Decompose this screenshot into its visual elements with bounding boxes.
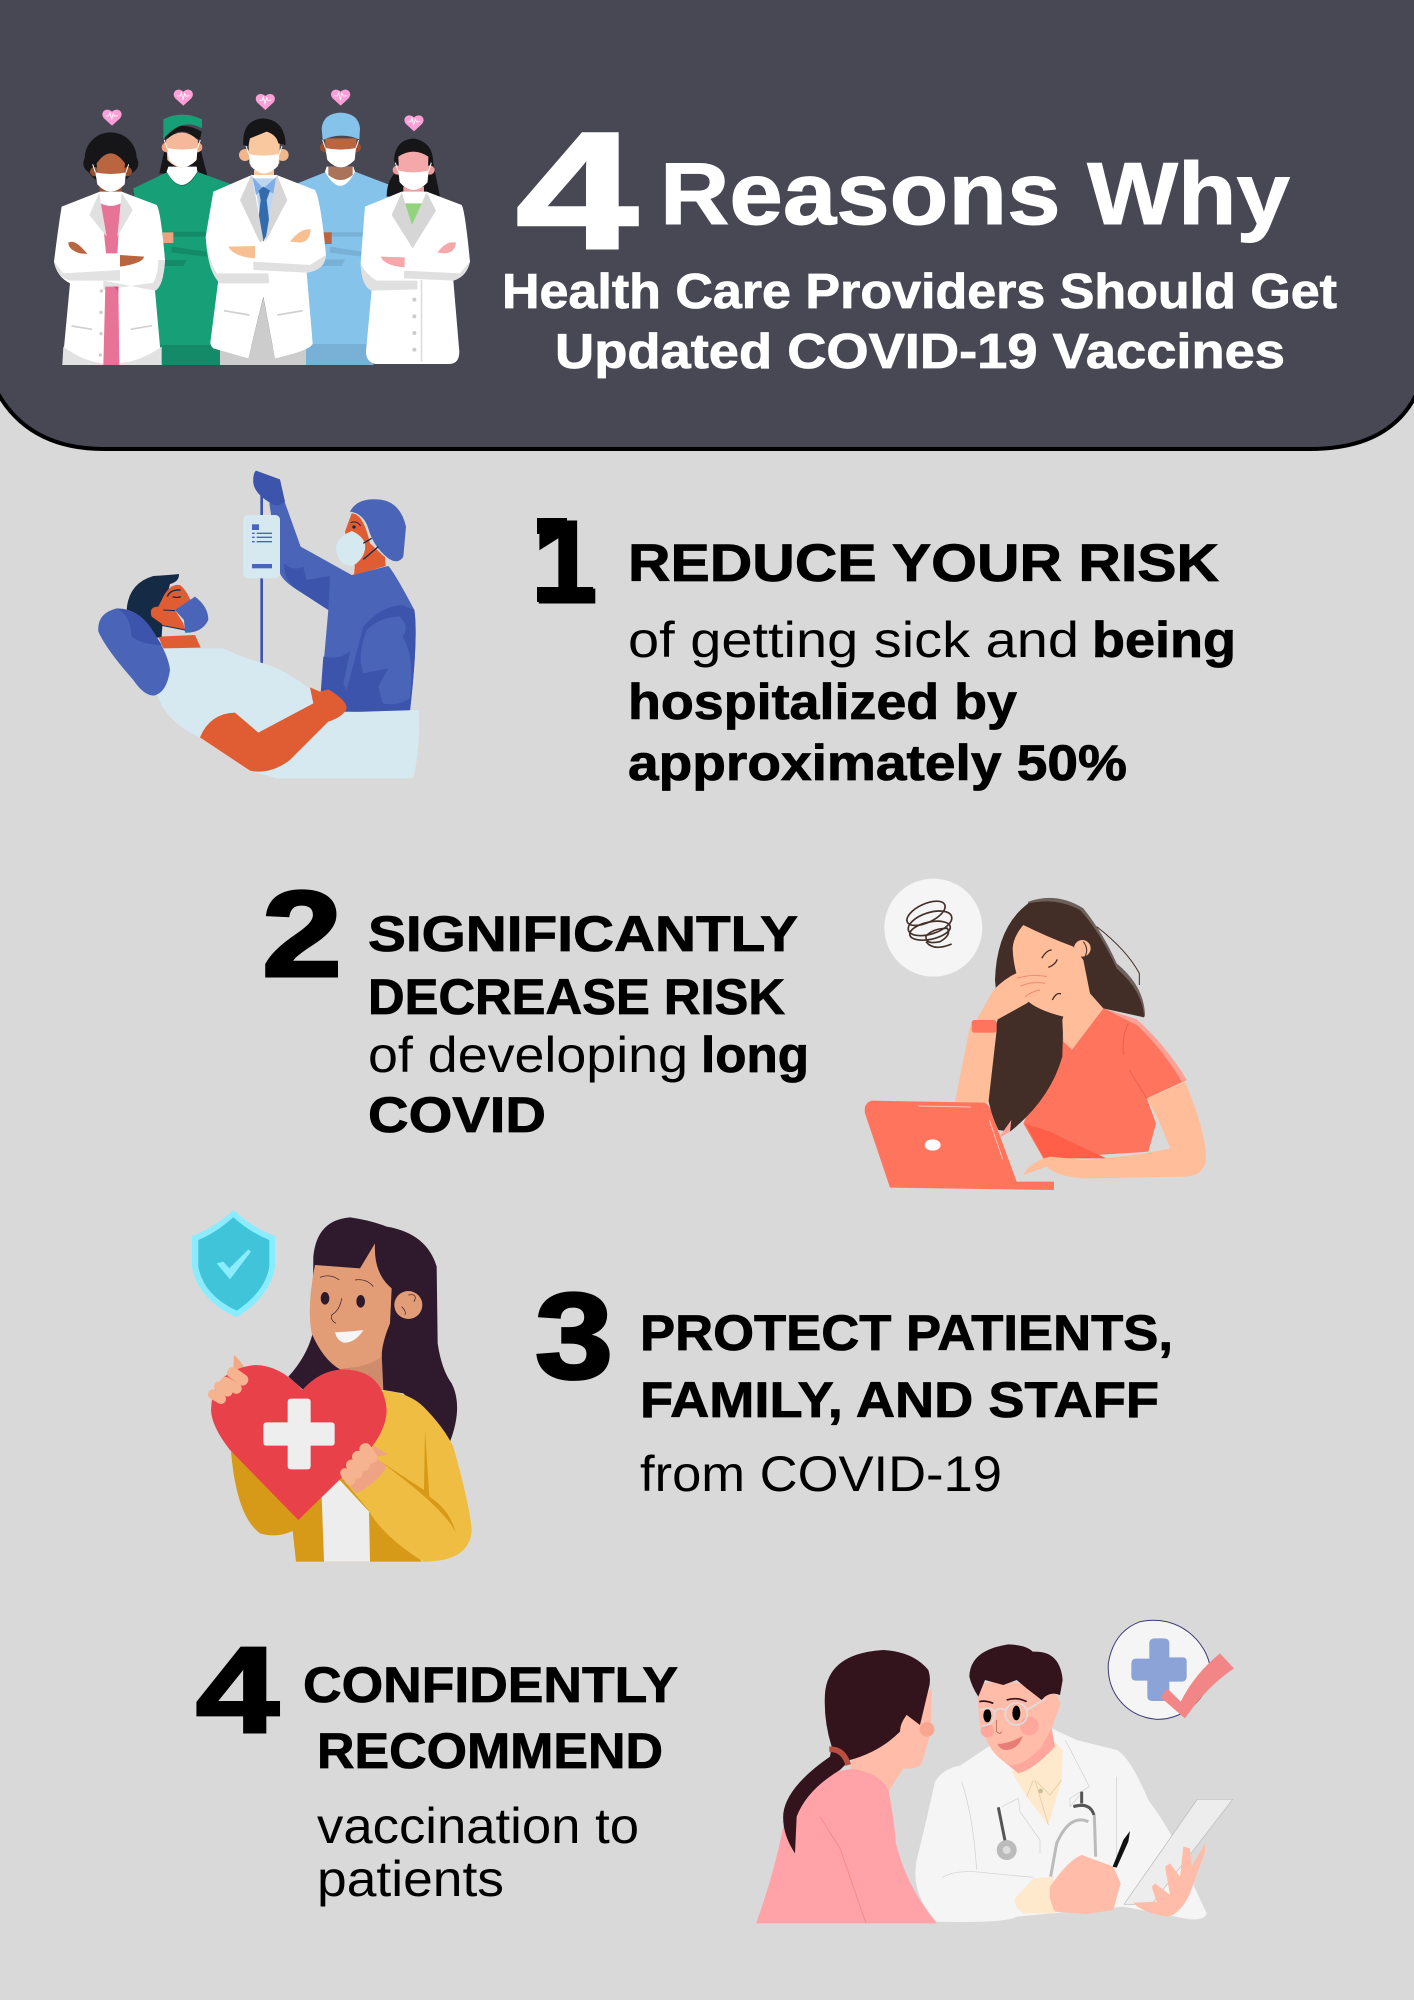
- reason 2 heading: DECREASE RISK: [368, 969, 785, 1025]
- reason 1 body: approximately 50%: [628, 735, 1127, 791]
- reason 2 body: COVID: [368, 1087, 546, 1143]
- reason 2 heading: [368, 906, 798, 1025]
- reason 3 heading: [640, 1305, 1173, 1428]
- woman: [231, 1217, 472, 1562]
- icon: shield with check: [192, 1210, 275, 1317]
- illustration: nurse adjusting IV for masked patient: [98, 471, 419, 778]
- title: Reasons Why: Reasons Why: [660, 144, 1290, 243]
- illustration: five masked health care providers: [54, 90, 470, 365]
- reason 2 body: long: [701, 1027, 809, 1083]
- title: large numeral 4: 4: [516, 99, 638, 284]
- hearts above providers: [102, 90, 424, 131]
- illustration: woman holding heart with cross: [192, 1210, 472, 1562]
- laptop: [865, 1101, 1054, 1190]
- subtitle: [502, 265, 1337, 379]
- subtitle: Health Care Providers Should Get: [502, 265, 1337, 319]
- reason 1 body: being: [1092, 612, 1236, 668]
- reason 1 body: of getting sick and: [628, 612, 1079, 668]
- reason 4 body: vaccination to: [317, 1798, 639, 1854]
- provider in blue scrubs: [293, 113, 390, 365]
- reason 1 body: hospitalized by: [628, 674, 1017, 730]
- reason 4 body: [317, 1798, 639, 1907]
- icon: medical cross badge with check: [1108, 1620, 1234, 1719]
- hands: [206, 1365, 387, 1493]
- numeral 2: 2: [262, 866, 342, 1002]
- woman: [955, 898, 1206, 1178]
- reason 4 heading: CONFIDENTLY: [303, 1657, 678, 1713]
- patient in bed: [98, 574, 419, 778]
- provider in white coat with blue tie: [206, 118, 326, 365]
- numeral 4: 4: [196, 1622, 279, 1758]
- reason 3 heading: FAMILY, AND STAFF: [640, 1372, 1159, 1428]
- reason 2 body: of developing: [368, 1027, 688, 1083]
- nurse: [253, 471, 416, 712]
- IV bag: [243, 515, 280, 578]
- reason 4 body: patients: [317, 1851, 504, 1907]
- reason 3 body: from COVID-19: [640, 1446, 1002, 1502]
- doctor: [915, 1644, 1233, 1922]
- reason 1 heading: REDUCE YOUR RISK: [628, 534, 1219, 593]
- reason 4 heading: [303, 1657, 678, 1779]
- reason 3 heading: PROTECT PATIENTS,: [640, 1305, 1173, 1361]
- provider in green scrubs: [133, 115, 233, 365]
- reason 2 heading: SIGNIFICANTLY: [368, 906, 798, 962]
- illustration: tired woman at laptop: [865, 879, 1206, 1190]
- illustration: doctor talking with patient: [756, 1620, 1234, 1923]
- heart with cross: [211, 1365, 387, 1520]
- reason 1 body: [628, 612, 1236, 791]
- provider in white coat with pink shirt: [54, 132, 165, 365]
- icon: dizzy thought bubble: [884, 879, 982, 977]
- reason 4 heading: RECOMMEND: [317, 1723, 663, 1779]
- reason 2 body: [368, 1027, 809, 1143]
- provider in white coat with green shirt: [361, 138, 470, 364]
- patient woman: [756, 1650, 937, 1923]
- numeral 1: 1: [533, 497, 597, 627]
- numeral 3: 3: [535, 1268, 613, 1404]
- header banner: [0, 0, 1414, 449]
- subtitle: Updated COVID-19 Vaccines: [555, 325, 1285, 379]
